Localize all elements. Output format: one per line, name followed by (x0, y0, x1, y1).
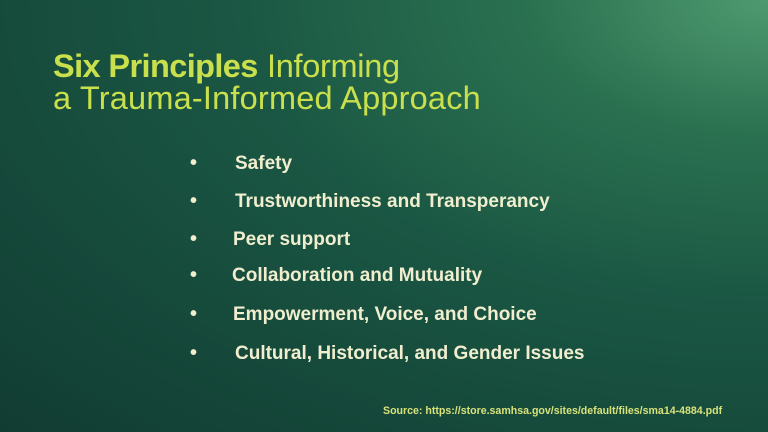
item: empowerment: Empowerment, Voice, and Choice (233, 304, 537, 325)
item: peer (190, 228, 350, 250)
item: safety: • (190, 152, 197, 174)
item: cultural: Cultural, Historical, and Gender Issues (235, 343, 584, 364)
source: Source: https://store.samhsa.gov/sites/default/files/sma14-4884.pdf (383, 405, 722, 417)
item: peer: • (190, 228, 197, 250)
item: trust: Trustworthiness and Transperancy (235, 191, 550, 212)
item: safety (190, 152, 292, 174)
title: a Trauma-Informed Approach (53, 80, 481, 116)
bullet list (190, 152, 584, 364)
item: empowerment: • (190, 303, 197, 325)
item: cultural: • (190, 342, 197, 364)
item: collaboration: • (190, 264, 197, 286)
title: Six Principles Informing (53, 48, 400, 84)
title (53, 48, 481, 116)
item: collaboration: Collaboration and Mutuality (232, 265, 482, 286)
item: trust: • (190, 190, 197, 212)
item: peer: Peer support (233, 229, 350, 250)
item: safety: Safety (235, 153, 292, 174)
